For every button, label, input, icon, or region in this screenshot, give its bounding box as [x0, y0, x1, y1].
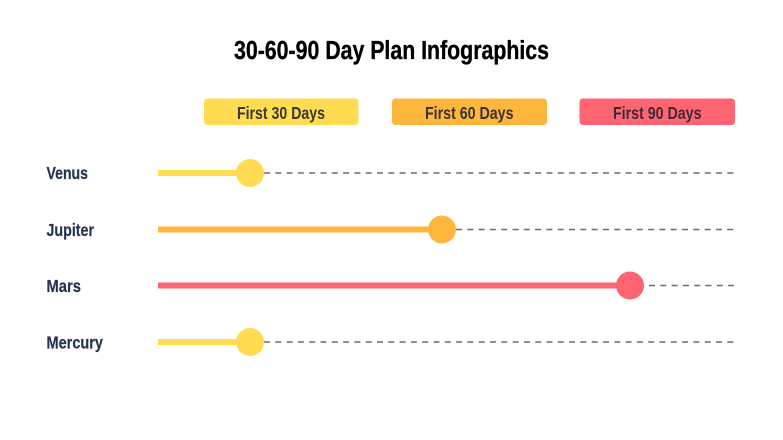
- marker: Venus: [236, 159, 264, 187]
- progress bar: Venus: [158, 170, 250, 176]
- row: Venus: [46, 159, 734, 187]
- label: Jupiter: Jupiter: [46, 220, 94, 240]
- progress bar: Jupiter: [158, 226, 442, 232]
- marker: Mercury: [236, 328, 264, 356]
- progress bar: Mercury: [158, 339, 250, 345]
- row: Jupiter: [46, 216, 734, 244]
- marker: Mars: [616, 272, 644, 300]
- title: 30-60-90 Day Plan Infographics: [234, 37, 549, 65]
- header: First 90 Days: [580, 98, 735, 125]
- header: First 30 Days: First 30 Days: [237, 103, 325, 123]
- header: First 30 Days: [204, 98, 358, 125]
- row: Mercury: [46, 328, 734, 356]
- header: First 60 Days: First 60 Days: [425, 103, 514, 123]
- label: Mars: Mars: [46, 276, 81, 296]
- progress bar: Mars: [158, 282, 630, 288]
- label: Venus: Venus: [46, 163, 88, 183]
- row: Mars: [46, 272, 734, 300]
- header: First 90 Days: First 90 Days: [613, 103, 702, 123]
- marker: Jupiter: [428, 216, 456, 244]
- label: Mercury: Mercury: [46, 332, 103, 352]
- header: First 60 Days: [392, 98, 547, 125]
